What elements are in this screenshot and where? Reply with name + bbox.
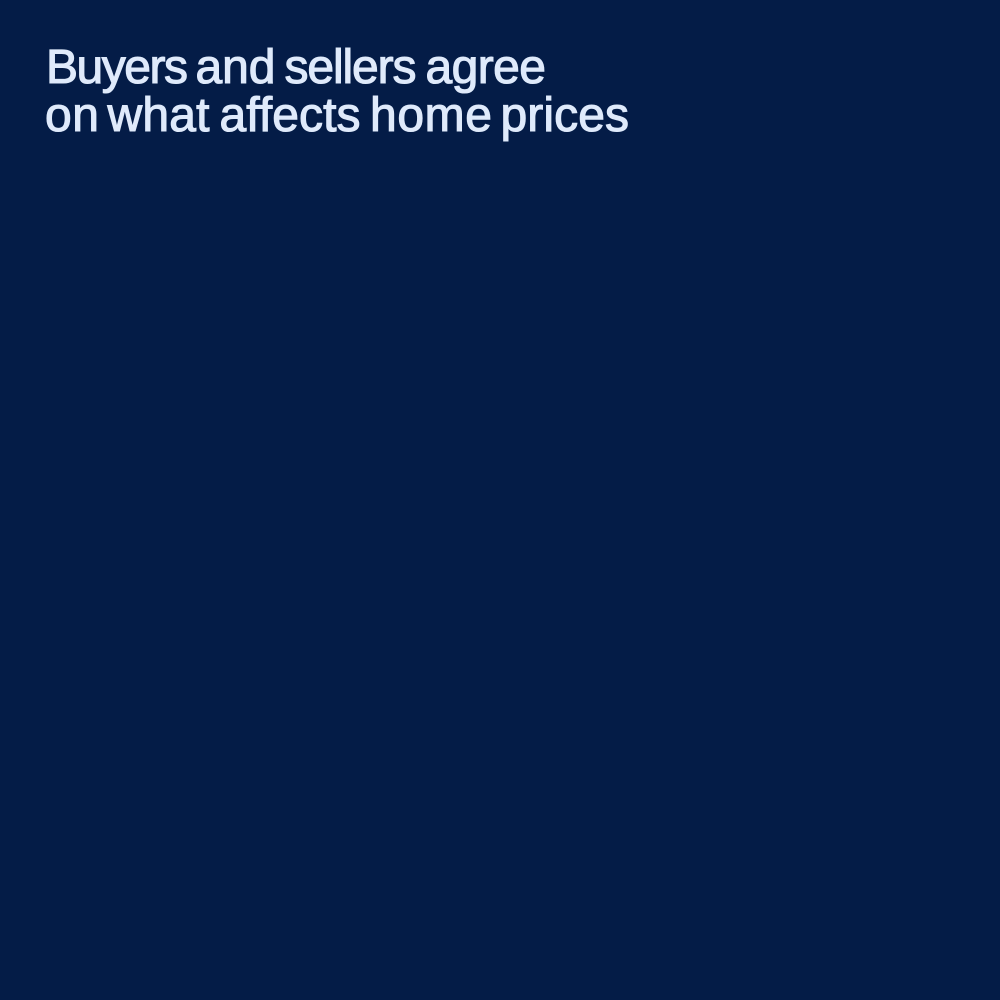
title: home [370,89,492,142]
title: and [196,41,276,94]
title: affects [220,89,360,142]
title: agree [426,41,546,94]
title: Buyers [46,41,188,94]
title: what [106,89,210,142]
title: sellers [284,41,416,94]
title: prices [500,89,629,142]
title: on [45,89,99,142]
title [45,41,629,142]
